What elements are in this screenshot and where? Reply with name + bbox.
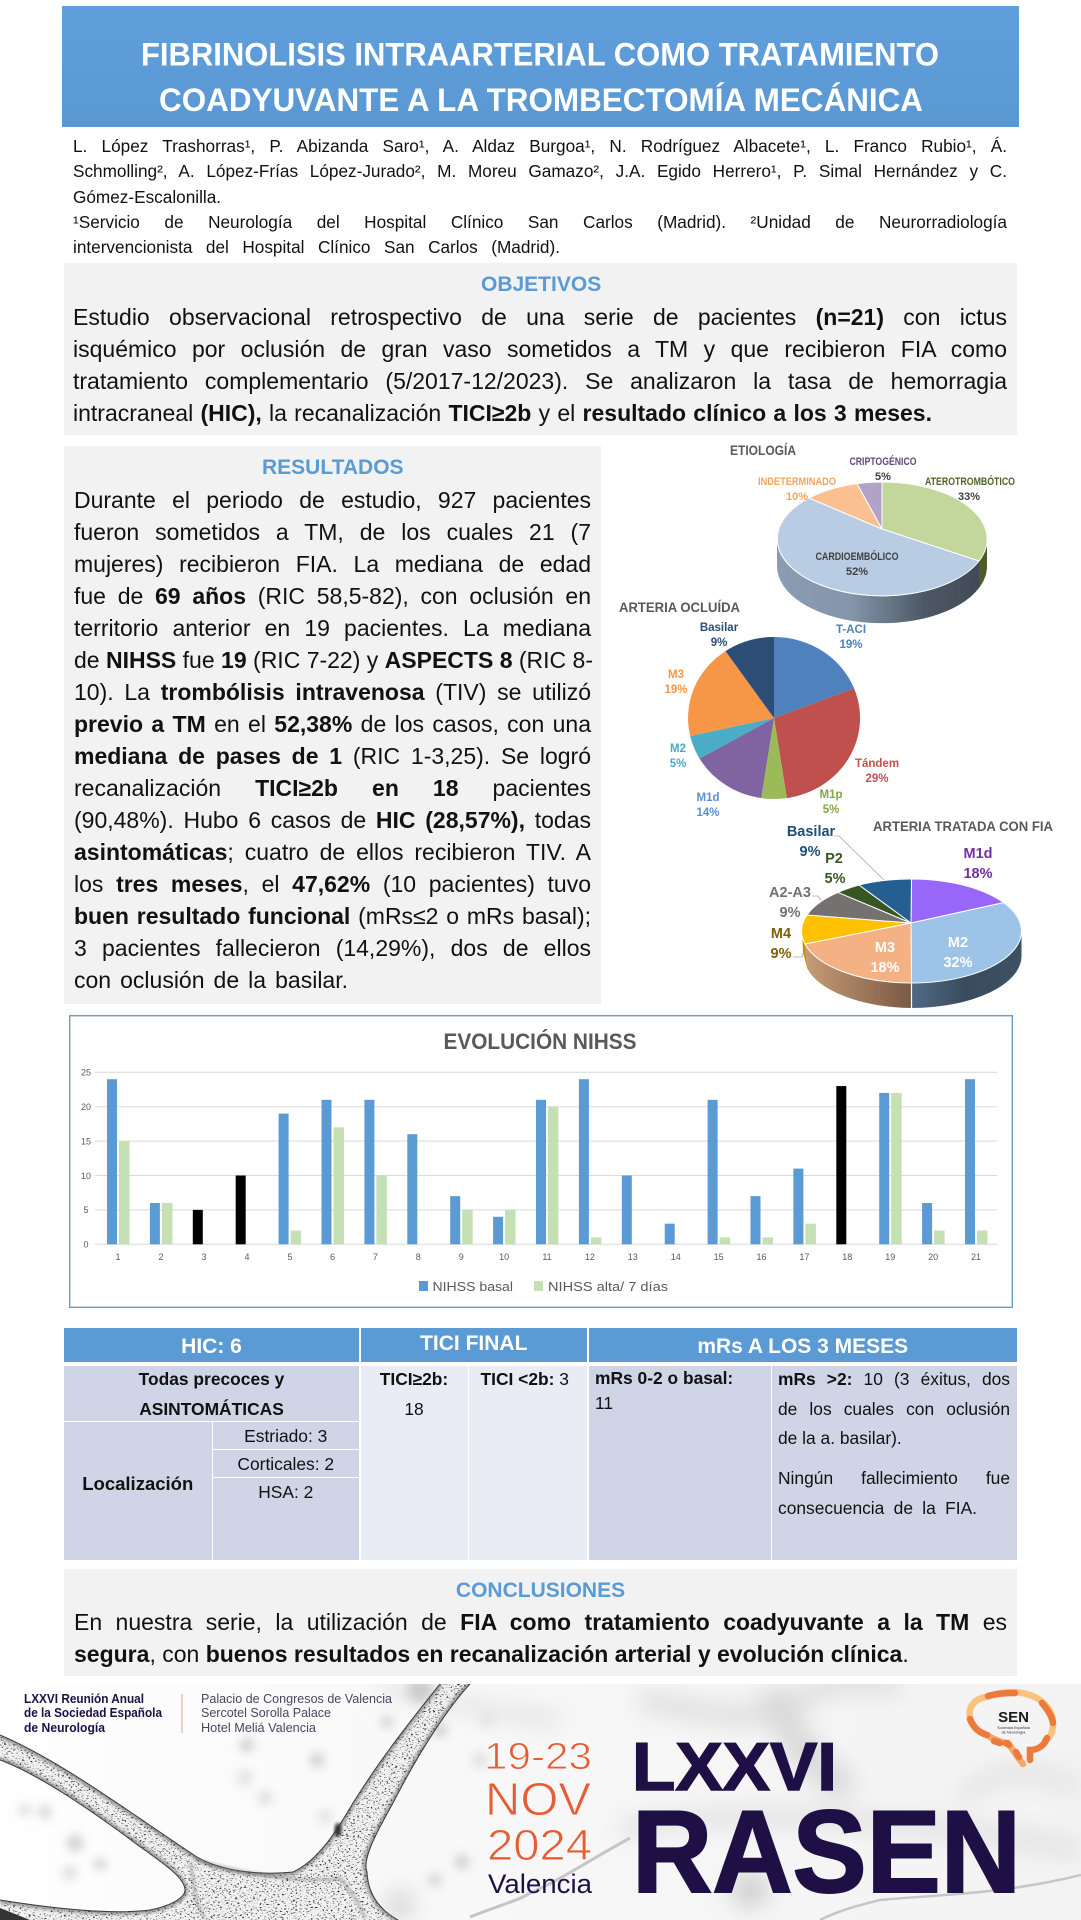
cell: mRs mayor de 2 (772, 1366, 1017, 1560)
venue text: Hotel Meliá Valencia (201, 1721, 316, 1735)
pie slices (688, 637, 860, 799)
labels: etiología: 52% (846, 566, 868, 578)
labels: arteria tratada: 18% (963, 866, 993, 882)
text: resultados: de NIHSS fue 19 (RIC 7-22) y ASPECTS 8 (RIC 8- (74, 646, 593, 672)
text: mRs detail: mRs >2: 10 (3 éxitus, dos (778, 1369, 1010, 1389)
labels: arteria tratada: A2-A3 (769, 885, 811, 901)
labels: arteria tratada: M3 (875, 940, 895, 956)
text: objetivos: tratamiento complementario (5/2017-12/2023). Se analizaron la tasa de hemorragia (73, 368, 1007, 394)
series: NIHSS basal (107, 1079, 975, 1244)
labels: arteria tratada: 32% (943, 955, 973, 971)
labels: arteria ocluída: M2 (670, 743, 686, 755)
cell: mRs 0-2: mRs 0-2 o basal: (595, 1368, 733, 1388)
cell: TICI mayor (360, 1366, 468, 1560)
labels: arteria ocluída: Tándem (855, 758, 899, 770)
y axis labels (81, 1068, 91, 1250)
heading: resultados: RESULTADOS (262, 456, 404, 479)
text: resultados: mujeres) recibieron FIA. La mediana de edad (74, 550, 591, 576)
x axis labels: 10 (499, 1252, 509, 1262)
x axis labels: 4 (244, 1252, 250, 1262)
panel: objetivos (64, 263, 1017, 435)
text: resultados: 10). La trombólisis intravenosa (TIV) se utilizó (74, 678, 591, 704)
organiser text (24, 1692, 163, 1735)
text: resultados: mediana de pases de 1 (RIC 1-3,25). Se logró (74, 742, 591, 768)
x axis labels: 11 (542, 1252, 552, 1262)
labels: arteria ocluída: M1p (820, 789, 842, 801)
authors and affiliations: Schmolling², A. López-Frías López-Jurado², M. Moreu Gamazo², J.A. Egido Herrero¹, P. Simal Hernández y C. (73, 161, 1007, 181)
y axis labels: 0 (83, 1240, 89, 1250)
authors and affiliations: intervencionista del Hospital Clínico San Carlos (Madrid). (73, 237, 560, 257)
legend: NIHSS alta/ 7 días (548, 1279, 669, 1294)
labels: arteria tratada: M1d (964, 846, 992, 862)
x axis labels: 12 (585, 1252, 595, 1262)
labels: arteria tratada: 5% (825, 871, 846, 887)
neuron body and dendrites (0, 1684, 470, 1920)
x axis labels: 3 (201, 1252, 207, 1262)
x axis labels: 15 (714, 1252, 724, 1262)
text: resultados: asintomáticas; cuatro de ellos recibieron TIV. A (74, 838, 591, 864)
text: resultados: recanalización TICI≥2b en 18 pacientes (74, 774, 591, 800)
organiser text: de Neurología (24, 1721, 106, 1735)
icon: SEN brain logo: de Neurología (1002, 1730, 1026, 1734)
x axis labels: 19 (885, 1252, 895, 1262)
labels: arteria tratada: 9% (800, 844, 821, 860)
labels: arteria ocluída (664, 622, 899, 819)
series: NIHSS alta (119, 1093, 988, 1244)
text: resultados: Durante el periodo de estudio, 927 pacientes (74, 486, 591, 512)
text: resultados: los tres meses, el 47,62% (10 pacientes) tuvo (74, 870, 591, 896)
heading: arteria tratada con FIA: ARTERIA TRATADA CON FIA (873, 819, 1053, 834)
y axis labels: 15 (81, 1136, 91, 1146)
heading: etiología: ETIOLOGÍA (730, 442, 796, 458)
text: objetivos: intracraneal (HIC), la recanalización TICI≥2b y el resultado clínico a los 3 meses. (73, 400, 932, 426)
heading: conclusiones: CONCLUSIONES (456, 1579, 625, 1602)
pie side wall (777, 539, 987, 623)
labels: arteria tratada: M2 (948, 935, 968, 951)
x axis labels: 13 (628, 1252, 638, 1262)
labels: arteria ocluída: 5% (670, 758, 686, 770)
y axis labels: 10 (81, 1171, 91, 1181)
labels: arteria tratada: M4 (771, 926, 791, 942)
cell: todas precoces (64, 1366, 359, 1420)
labels: arteria ocluída: M3 (668, 669, 684, 681)
event name: RASEN (632, 1786, 1021, 1917)
text: resultados: buen resultado funcional (mRs≤2 o mRs basal); (74, 902, 591, 928)
text: resultados: con oclusión de la basilar. (74, 966, 348, 992)
legend (419, 1279, 669, 1294)
labels: etiología: 10% (786, 491, 808, 503)
cell: localización (64, 1422, 212, 1560)
labels: arteria tratada: 9% (771, 946, 792, 962)
x axis labels: 5 (287, 1252, 293, 1262)
pie slices (802, 879, 1021, 983)
pie slices (777, 482, 987, 596)
labels: arteria ocluída: 19% (664, 684, 688, 696)
labels: arteria tratada: 18% (870, 960, 900, 976)
text: conclusiones: En nuestra serie, la utilización de FIA como tratamiento coadyuvante a la TM es (74, 1609, 1007, 1635)
results table (64, 1328, 1017, 1560)
text: objetivos: Estudio observacional retrospectivo de una serie de pacientes (n=21) con ictus (73, 304, 1007, 330)
title banner (62, 6, 1019, 127)
authors and affiliations: L. López Trashorras¹, P. Abizanda Saro¹, A. Aldaz Burgoa¹, N. Rodríguez Albacete¹, L. Franco Rubio¹, Á. (73, 136, 1007, 156)
labels: etiología: CARDIOEMBÓLICO (816, 550, 899, 563)
text: mRs detail: de la a. basilar). (778, 1428, 902, 1448)
table header: TICI final (360, 1328, 587, 1362)
venue text: Palacio de Congresos de Valencia (201, 1692, 392, 1706)
authors and affiliations (73, 136, 1007, 257)
event name (636, 1742, 1014, 1894)
cell: mRs 0-2: 11 (595, 1393, 613, 1413)
pie chart: arteria ocluída (619, 600, 899, 819)
cell: TICI menor (468, 1366, 587, 1560)
event name: LXXVI (632, 1730, 837, 1805)
authors and affiliations: ¹Servicio de Neurología del Hospital Clínico San Carlos (Madrid). ²Unidad de Neurorradiología (73, 212, 1007, 232)
event dates: 19-23 (484, 1736, 592, 1778)
organiser text: LXXVI Reunión Anual (24, 1692, 144, 1706)
cell: todas precoces: Todas precoces y (139, 1369, 284, 1389)
cell: corticales: Corticales: 2 (237, 1454, 334, 1474)
cell: mRs 0-2 (588, 1366, 770, 1560)
labels: arteria tratada: 9% (780, 905, 801, 921)
y axis labels: 25 (81, 1068, 91, 1078)
text: mRs detail: de los cuales con oclusión (778, 1398, 1010, 1418)
organiser text: de la Sociedad Española (24, 1706, 163, 1720)
labels: arteria ocluída: 5% (823, 804, 839, 816)
table header: HIC: HIC: 6 (181, 1335, 242, 1358)
text: mRs detail: consecuencia de la FIA. (778, 1498, 977, 1518)
labels: etiología (758, 455, 1015, 578)
bar chart: evolución NIHSS (69, 1015, 1013, 1308)
labels: etiología: 5% (875, 471, 891, 483)
title banner: COADYUVANTE A LA TROMBECTOMÍA MECÁNICA (159, 82, 923, 118)
text: resultados (74, 486, 593, 992)
labels: etiología: 33% (958, 491, 980, 503)
legend: NIHSS basal (432, 1279, 513, 1294)
event dates (488, 1743, 590, 1860)
labels: arteria ocluída: Basilar (700, 622, 739, 634)
labels: arteria ocluída: 19% (839, 639, 863, 651)
labels: arteria tratada: P2 (825, 851, 843, 867)
table header: mRs: mRs A LOS 3 MESES (697, 1335, 908, 1358)
x axis labels: 21 (971, 1252, 981, 1262)
x axis labels (115, 1252, 981, 1262)
x axis labels: 1 (115, 1252, 121, 1262)
labels: etiología: CRIPTOGÉNICO (850, 455, 917, 468)
pie side wall (802, 931, 1022, 1008)
text: conclusiones (74, 1609, 1007, 1667)
x axis labels: 20 (928, 1252, 938, 1262)
table header: HIC (64, 1328, 359, 1362)
labels: arteria tratada: Basilar (787, 824, 836, 840)
x axis labels: 6 (330, 1252, 335, 1262)
x axis labels: 17 (799, 1252, 809, 1262)
cell: TICI menor: TICI <2b: 3 (480, 1369, 569, 1389)
cell: HSA (212, 1478, 359, 1560)
labels: arteria tratada (769, 824, 993, 976)
venue text (202, 1694, 392, 1732)
labels: arteria ocluída: T-ACI (836, 624, 866, 636)
y axis labels: 5 (83, 1205, 89, 1215)
y axis labels: 20 (81, 1102, 91, 1112)
out of focus spots (20, 1677, 494, 1886)
x axis labels: 8 (416, 1252, 421, 1262)
labels: arteria ocluída: 29% (865, 773, 889, 785)
text: objetivos (73, 304, 1008, 426)
heading: objetivos: OBJETIVOS (481, 273, 601, 296)
icon: SEN brain logo: Sociedad Española (997, 1726, 1031, 1730)
title banner: FIBRINOLISIS INTRAARTERIAL COMO TRATAMIENTO (141, 36, 939, 72)
cell: todas precoces: ASINTOMÁTICAS (139, 1398, 284, 1418)
chart title: EVOLUCIÓN NIHSS (444, 1029, 636, 1054)
pie chart: arteria tratada con FIA (769, 819, 1053, 1008)
pie chart: etiología (730, 442, 1015, 624)
leader lines (793, 836, 885, 957)
text: resultados: (90,48%). Hubo 6 casos de HIC (28,57%), todas (74, 806, 591, 832)
cell: HSA: HSA: 2 (258, 1482, 313, 1502)
event dates: NOV (485, 1773, 591, 1825)
conference banner (0, 1684, 1081, 1920)
blurred background neurites (380, 1683, 1081, 1919)
x axis labels: 2 (158, 1252, 164, 1262)
cell: TICI mayor: TICI≥2b: (380, 1369, 448, 1389)
panel: resultados (64, 446, 601, 1004)
x axis labels: 9 (459, 1252, 464, 1262)
text: mRs detail: Ningún fallecimiento fue (778, 1468, 1010, 1488)
text: resultados: previo a TM en el 52,38% de los casos, con una (74, 710, 591, 736)
venue text: Sercotel Sorolla Palace (201, 1706, 331, 1720)
cell: estriado: Estriado: 3 (244, 1426, 327, 1446)
text: resultados: territorio anterior en 19 pacientes. La mediana (74, 614, 591, 640)
icon: SEN brain logo: SEN (998, 1709, 1029, 1726)
event dates: 2024 (487, 1821, 592, 1870)
text: resultados: fueron sometidos a TM, de los cuales 21 (7 (74, 518, 591, 544)
cell: corticales (212, 1450, 359, 1476)
text: objetivos: isquémico por oclusión de gran vaso sometidos a TM y que recibieron FIA como (73, 336, 1007, 362)
labels: arteria ocluída: 9% (711, 637, 727, 649)
text: resultados: fue de 69 años (RIC 58,5-82), con oclusión en (74, 582, 591, 608)
panel: conclusiones (64, 1569, 1017, 1676)
thin neurites (470, 1838, 1081, 1920)
authors and affiliations: Gómez-Escalonilla. (73, 187, 221, 207)
text: mRs detail (778, 1369, 1010, 1518)
text: conclusiones: segura, con buenos resultados en recanalización arterial y evolución clínica. (74, 1640, 909, 1666)
labels: arteria ocluída: M1d (696, 792, 720, 804)
cell: localización: Localización (82, 1472, 193, 1494)
heading: arteria ocluída: ARTERIA OCLUÍDA (619, 600, 740, 615)
labels: etiología: INDETERMINADO (758, 476, 836, 488)
event city: Valencia (488, 1869, 593, 1899)
x axis labels: 14 (671, 1252, 681, 1262)
x axis labels: 16 (756, 1252, 767, 1262)
table header: mRs (588, 1328, 1017, 1362)
labels: etiología: ATEROTROMBÓTICO (925, 475, 1015, 488)
labels: arteria ocluída: 14% (696, 807, 720, 819)
x axis labels: 7 (373, 1252, 378, 1262)
table header: TICI final: TICI FINAL (420, 1332, 527, 1355)
icon: SEN brain logo (970, 1692, 1053, 1764)
text: resultados: 3 pacientes fallecieron (14,29%), dos de ellos (74, 934, 591, 960)
cell: TICI mayor: 18 (404, 1398, 424, 1418)
x axis labels: 18 (842, 1252, 852, 1262)
cell: estriado (212, 1422, 359, 1448)
